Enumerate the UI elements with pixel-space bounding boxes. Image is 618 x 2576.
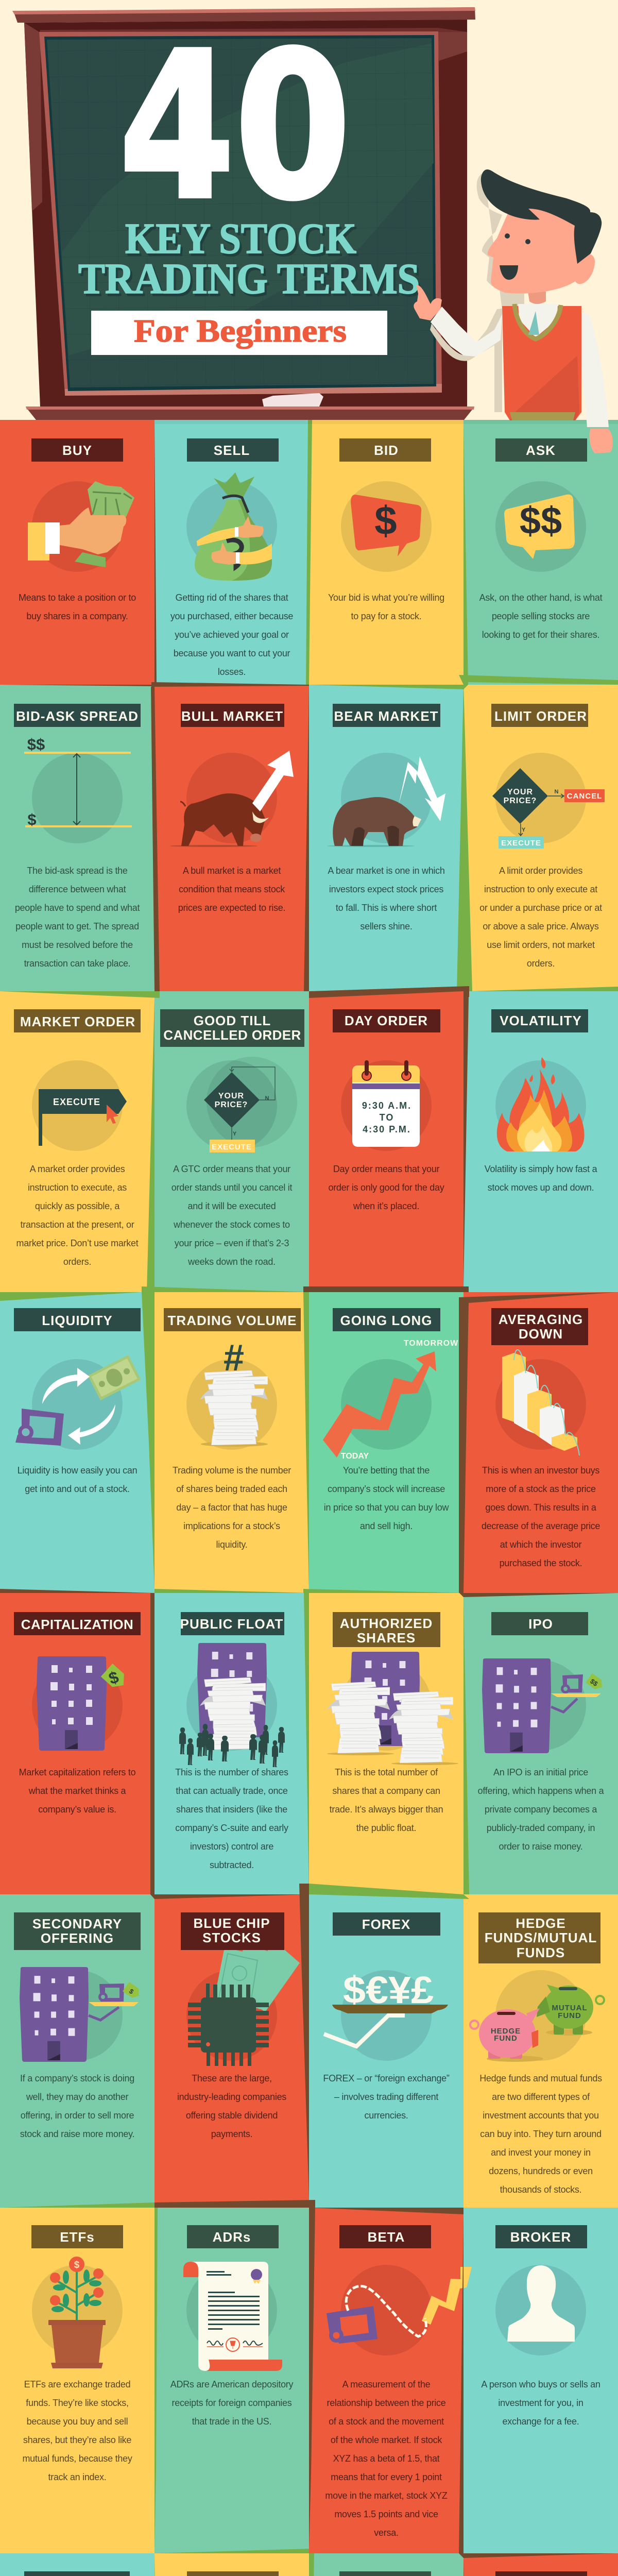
icon: rising zigzag arrow: TODAY [341,1452,369,1461]
heading: buy: BUY [62,443,92,458]
icon: limit order flowchart: N [555,789,559,795]
icon: spread diagram: $ [27,810,37,828]
description: authorized shares: trade. It’s always bigger than [330,1804,443,1815]
description: ipo: order to raise money. [499,1841,583,1852]
heading: limit order: LIMIT ORDER [494,708,587,724]
panel: liquidity [0,1292,154,1593]
heading: bull market: BULL MARKET [181,708,283,724]
description: ipo: offering, which happens when a [478,1786,605,1796]
description: hedge funds and mutual funds: dozens, hundreds or even [489,2166,593,2176]
description: broker: exchange for a fee. [503,2416,579,2427]
description: ipo: An IPO is an initial price [493,1767,588,1777]
icon: piggy banks: FUND [558,2011,581,2020]
teacher: outline [430,173,524,412]
description: bear market: sellers shine. [360,921,413,931]
heading: adrs [187,2225,279,2248]
description: going long: in price so that you can buy low [324,1502,450,1513]
heading: secondary offering: SECONDARY [32,1916,122,1931]
description: bid: to pay for a stock. [351,611,421,621]
icon: spread diagram [24,735,132,843]
description: blue chip stocks: These are the large, [192,2073,272,2083]
description: sell: you purchased, either because [170,611,293,621]
icon: bull with rising arrow [170,751,294,847]
panel: trading volume [154,1292,309,1593]
description: beta: of a stock and the movement [329,2416,444,2427]
description: limit order: A limit order provides [499,866,582,876]
description: bid-ask spread: The bid-ask spread is the [27,866,128,876]
heading: forex [333,1912,440,1936]
icon: microchip with cash [186,1940,300,2066]
description: broker: investment for you, in [498,2398,583,2408]
heading: dividend [187,2571,279,2576]
description: capitalization: what the market thinks a [28,1786,127,1796]
description: hedge funds and mutual funds: thousands of stocks. [500,2184,581,2195]
description: averaging down: This is when an investor buys [482,1465,599,1476]
ledge: top [12,7,475,23]
heading: good till cancelled order: GOOD TILL [194,1013,271,1028]
icon: money plant [32,2257,123,2368]
description: market order: A market order provides [30,1164,125,1174]
description: bid-ask spread: must be resolved before the [22,940,133,950]
heading: good till cancelled order [160,1009,304,1047]
description: ask: Ask, on the other hand, is what [479,592,603,603]
heading: market order [14,1009,141,1032]
description: buy: buy shares in a company. [26,611,128,621]
description: authorized shares: shares that a company can [332,1786,440,1796]
chalkboard [12,7,475,420]
panel: volatility [464,991,618,1292]
description: etfs: track an index. [48,2472,107,2482]
description: going long: You’re betting that the [343,1465,430,1476]
icon: flame [495,1057,586,1151]
heading: good till cancelled order: CANCELLED ORDER [163,1027,301,1043]
heading: trading volume [164,1308,301,1331]
description: good till cancelled order: whenever the stock comes to [173,1219,290,1230]
description: averaging down: purchased the stock. [500,1558,582,1568]
description: blue chip stocks: offering stable dividend [186,2110,278,2121]
icon: limit order flowchart: YOUR [507,788,533,796]
heading: capitalization: CAPITALIZATION [21,1617,133,1632]
description: bull market: condition that means stock [179,884,285,894]
description: adrs: ADRs are American depository [170,2379,294,2389]
icon: cash and certificate cycle [15,1355,141,1450]
description: bull market: prices are expected to rise. [178,903,285,913]
panel: ipo [464,1593,618,1894]
heading: day trading [24,2571,130,2576]
description: adrs: receipts for foreign companies [171,2398,292,2408]
description: bear market: to fall. This is where short [336,903,437,913]
heading: ask: ASK [526,443,556,458]
icon: limit order flowchart: PRICE? [504,796,537,805]
heading: volatility [491,1009,588,1032]
description: trading volume: liquidity. [216,1539,247,1550]
description: averaging down: more of a stock as the price [486,1484,596,1494]
panel: capitalization [0,1593,154,1894]
description: day order: order is only good for the day [328,1182,444,1193]
description: secondary offering: stock and raise more money. [20,2129,134,2139]
description: liquidity: get into and out of a stock. [25,1484,130,1494]
icon: calendar: 9:30 A.M. [362,1100,411,1111]
heading: ipo [491,1612,588,1635]
panel: limit order [464,685,618,991]
description: capitalization: company’s value is. [38,1804,116,1815]
description: limit order: orders. [527,958,555,969]
heading: bid-ask spread [14,704,141,727]
icon: falling bars [495,1350,586,1455]
icon: building with paper stacks [327,1652,458,1765]
icon: building with price tag [32,1656,129,1751]
description: good till cancelled order: your price – even if that’s 2-3 [175,1238,289,1248]
description: beta: means that for every 1 point [331,2472,442,2482]
description: bid: Your bid is what you’re willing [328,592,444,603]
description: limit order: use limit orders, not market [487,940,595,950]
description: averaging down: decrease of the average price [482,1521,600,1531]
description: etfs: shares, but they’re also like [23,2435,131,2445]
description: blue chip stocks: payments. [211,2129,252,2139]
heading: etfs: ETFs [60,2229,95,2245]
heading: going long: GOING LONG [340,1313,433,1328]
heading: averaging down: AVERAGING [499,1312,583,1327]
heading: ipo: IPO [528,1616,553,1632]
panel: beta [309,2208,472,2553]
icon: building serving certificate: $$ [589,1677,599,1688]
description: adrs: that trade in the US. [192,2416,271,2427]
panel: hedge funds and mutual funds [464,1894,618,2208]
panel: broker [464,2208,618,2553]
description: hedge funds and mutual funds: investment accounts that you [483,2110,599,2121]
heading: authorized shares [333,1612,440,1647]
icon: money plant: $ [74,2260,80,2270]
heading: bear market [333,704,440,727]
icon: piggy banks: MUTUAL [552,2004,588,2012]
icon: speech bubble dollar [341,481,432,572]
heading: authorized shares: SHARES [357,1630,416,1646]
description: going long: and sell high. [360,1521,413,1531]
icon: limit order flowchart [492,753,605,849]
description: hedge funds and mutual funds: are two different types of [492,2092,590,2102]
heading: bid-ask spread: BID-ASK SPREAD [16,708,139,724]
icon: gtc flowchart: EXECUTE [212,1143,252,1151]
heading: exchange [339,2571,431,2576]
description: broker: A person who buys or sells an [481,2379,600,2389]
icon: gtc flowchart: PRICE? [215,1100,248,1109]
description: beta: moves 1.5 points and vice [334,2509,438,2519]
icon: limit order flowchart: Y [522,827,526,833]
teacher character [414,170,613,453]
icon: gtc flowchart: YOUR [218,1092,244,1100]
description: capitalization: Market capitalization refers to [19,1767,136,1777]
subtitle banner [91,311,387,355]
description: sell: Getting rid of the shares that [175,592,288,603]
description: hedge funds and mutual funds: and invest your money in [491,2147,591,2158]
description: public float: subtracted. [210,1860,254,1870]
description: trading volume: Trading volume is the number [173,1465,291,1476]
heading: hedge funds/mutual funds: HEDGE [516,1916,566,1931]
teacher: hanging hand [589,429,613,453]
icon: piggy banks: FUND [494,2034,518,2043]
panel: good till cancelled order [154,991,309,1292]
description: forex: FOREX – or “foreign exchange” [323,2073,450,2083]
description: blue chip stocks: industry-leading companies [177,2092,286,2102]
icon: money bag hug [186,472,277,581]
heading: secondary offering: OFFERING [41,1930,114,1946]
panel: sell [154,420,309,685]
icon: speech bubble dollars [495,481,586,572]
description: authorized shares: This is the total number of [335,1767,438,1777]
panel: public float [154,1593,309,1894]
heading: execution [495,2571,587,2576]
heading: hedge funds/mutual funds: FUNDS/MUTUAL [485,1930,597,1945]
icon: calendar [341,1060,432,1151]
heading: averaging down: DOWN [519,1326,563,1342]
panel: execution [464,2553,618,2576]
heading: sell [187,438,279,462]
icon: currencies on tray [324,1969,448,2061]
description: market order: market price. Don’t use market [16,1238,139,1248]
heading: bid [339,438,431,462]
description: bear market: investors expect stock prices [329,884,443,894]
icon: gtc flowchart: Y [233,1131,237,1137]
icon: rising zigzag arrow: TOMORROW [404,1339,458,1348]
heading: bull market [181,704,284,727]
heading: bid: BID [374,443,399,458]
icon: calendar: 4:30 P.M. [363,1124,411,1134]
heading: hedge funds/mutual funds [478,1912,600,1963]
icon: bear with falling arrow [327,753,445,847]
description: public float: company’s C-suite and early [175,1823,288,1833]
description: authorized shares: the public float. [356,1823,416,1833]
icon: gtc flowchart: N [265,1095,269,1101]
panel: secondary offering [0,1894,154,2208]
description: trading volume: of shares being traded each [176,1484,287,1494]
panel: averaging down [464,1292,618,1593]
icon: execute flag [32,1060,127,1151]
panel: ask [464,420,618,685]
description: day order: when it’s placed. [353,1201,419,1211]
description: market order: quickly as possible, a [35,1201,120,1211]
description: going long: company’s stock will increase [328,1484,445,1494]
description: market order: transaction at the present, or [20,1219,134,1230]
description: buy: Means to take a position or to [19,592,136,603]
description: limit order: instruction to only execute at [484,884,597,894]
title: key stock trading terms [78,215,420,303]
title: key stock trading terms: TRADING TERMS [78,255,420,303]
panel: forex [309,1894,464,2208]
description: secondary offering: well, they may do another [26,2092,128,2102]
heading: public float: PUBLIC FLOAT [180,1616,283,1632]
teacher: right sleeve [577,311,609,427]
panel: buy [0,420,154,685]
icon: paper stack with hash [186,1337,277,1450]
panel: day trading [0,2553,154,2576]
description: good till cancelled order: A GTC order means that your [173,1164,290,1174]
description: volatility: Volatility is simply how fast a [485,1164,598,1174]
description: beta: XYZ has a beta of 1.5, that [333,2453,440,2464]
icon: building with price tag: $ [107,1668,121,1688]
title: 40: 40 [119,9,351,244]
heading: market order: MARKET ORDER [20,1014,135,1029]
description: beta: versa. [374,2528,399,2538]
panel: going long [309,1292,464,1593]
heading: broker [495,2225,587,2248]
panel: exchange [309,2553,464,2576]
description: market order: orders. [63,1257,91,1267]
icon: building serving certificate [482,1658,605,1753]
description: sell: because you want to cut your [174,648,290,658]
heading: beta [339,2225,431,2248]
panel: adrs [154,2208,309,2553]
description: beta: A measurement of the [342,2379,431,2389]
heading: liquidity: LIQUIDITY [42,1313,113,1328]
heading: blue chip stocks: STOCKS [202,1930,261,1945]
description: good till cancelled order: and it will be executed [188,1201,276,1211]
heading: forex: FOREX [362,1917,410,1932]
description: trading volume: implications for a stock’s [183,1521,280,1531]
description: averaging down: goes down. This results in a [485,1502,597,1513]
heading: beta: BETA [368,2229,405,2245]
icon: limit order flowchart: CANCEL [567,792,602,801]
icon: limit order flowchart: EXECUTE [501,839,541,848]
description: etfs: ETFs are exchange traded [24,2379,130,2389]
description: hedge funds and mutual funds: can buy into. They turn around [480,2129,602,2139]
icon: speech bubble dollars: $$ [520,499,562,542]
heading: bear market: BEAR MARKET [334,708,439,724]
icon: speech bubble dollar: $ [374,498,397,543]
heading: limit order [491,704,588,727]
heading: authorized shares: AUTHORIZED [340,1616,433,1631]
description: forex: currencies. [364,2110,408,2121]
panel: authorized shares [309,1593,464,1894]
description: bid-ask spread: transaction can take place. [24,958,130,969]
chalk [262,393,323,406]
heading: broker: BROKER [510,2229,571,2245]
description: averaging down: at which the investor [500,1539,581,1550]
description: etfs: funds. They’re like stocks, [26,2398,129,2408]
panel: bull market [154,685,309,991]
icon: certificate document [183,2262,282,2371]
description: limit order: or above a sale price. Always [483,921,599,931]
heading: ask [495,438,587,462]
teacher: arm pointing [414,285,502,357]
description: secondary offering: If a company’s stock is doing [20,2073,134,2083]
description: public float: investors) control are [190,1841,273,1852]
description: public float: that can actually trade, once [176,1786,288,1796]
ledge: bottom [26,406,474,420]
description: limit order: or under a purchase price or at [479,903,602,913]
heading: volatility: VOLATILITY [500,1013,582,1028]
panel: day order [309,991,464,1292]
description: ipo: private company becomes a [485,1804,597,1815]
heading: trading volume: TRADING VOLUME [168,1313,297,1328]
description: bid-ask spread: difference between what [29,884,126,894]
description: bid-ask spread: people want to get. The spread [15,921,139,931]
heading: public float [180,1612,284,1635]
description: etfs: mutual funds, because they [22,2453,132,2464]
icon: building serving certificate: $ [128,1987,135,1996]
heading: secondary offering [14,1912,141,1950]
icon: paper stack with hash: # [224,1337,244,1379]
description: sell: losses. [218,667,246,677]
icon: building, papers and people [179,1643,285,1767]
heading: sell: SELL [214,443,250,458]
icon: currencies on tray: $€¥£ [343,1969,434,2011]
icon: spread diagram: $$ [27,735,45,753]
icon: person silhouette [495,2265,586,2355]
icon: building serving certificate [20,1967,142,2062]
description: volatility: stock moves up and down. [488,1182,594,1193]
description: etfs: because you buy and sell [27,2416,128,2427]
description: beta: move in the market, stock XYZ [325,2490,448,2501]
description: forex: – involves trading different [334,2092,438,2102]
icon: chained certificate and arrow [327,2265,472,2355]
heading: blue chip stocks [181,1912,284,1950]
description: ask: looking to get for their shares. [482,630,599,640]
heading: blue chip stocks: BLUE CHIP [193,1916,270,1931]
heading: hedge funds/mutual funds: FUNDS [517,1945,565,1960]
description: hedge funds and mutual funds: Hedge funds and mutual funds [479,2073,602,2083]
description: ask: people selling stocks are [492,611,590,621]
title: key stock trading terms: KEY STOCK [125,215,356,263]
teacher: vest [502,304,581,420]
panel: bid-ask spread [0,685,154,991]
icon: execute flag: EXECUTE [53,1097,100,1107]
description: market order: instruction to execute, as [28,1182,127,1193]
description: trading volume: day – a factor that has huge [176,1502,287,1513]
heading: capitalization [14,1612,141,1635]
panel: etfs [0,2208,154,2553]
subtitle banner: For Beginners [134,314,347,349]
heading: averaging down [491,1308,588,1345]
heading: adrs: ADRs [213,2229,251,2245]
description: good till cancelled order: order stands until you cancel it [171,1182,293,1193]
panel: blue chip stocks [154,1894,309,2208]
description: bull market: A bull market is a market [183,866,281,876]
panel: dividend [154,2553,309,2576]
description: public float: shares that insiders (like the [176,1804,287,1815]
heading: day order: DAY ORDER [345,1013,428,1028]
heading: going long [333,1308,440,1331]
description: secondary offering: offering, in order to sell more [21,2110,134,2121]
description: liquidity: Liquidity is how easily you can [18,1465,137,1476]
description: good till cancelled order: weeks down the road. [187,1257,276,1267]
description: day order: Day order means that your [333,1164,439,1174]
icon: gtc flowchart [186,1057,297,1153]
heading: liquidity [14,1308,141,1331]
heading: buy [31,438,123,462]
icon: piggy banks [470,1970,604,2062]
heading: day order [333,1009,440,1032]
description: bid-ask spread: people have to spend and what [15,903,140,913]
heading: etfs [31,2225,123,2248]
description: ipo: publicly-traded company, in [487,1823,595,1833]
description: bear market: A bear market is one in which [328,866,445,876]
icon: rising zigzag arrow [323,1339,458,1461]
description: public float: This is the number of shares [175,1767,288,1777]
description: sell: you’ve achieved your goal or [175,630,289,640]
icon: hand holding cash [28,481,134,572]
icon: calendar: TO [380,1112,394,1123]
teacher: neck [528,292,546,304]
panel: market order [0,991,154,1292]
icon: piggy banks: HEDGE [491,2027,521,2036]
description: beta: of the whole market. If stock [331,2435,442,2445]
description: beta: relationship between the price [327,2398,446,2408]
teacher: head [481,170,602,294]
panel: bid [309,420,464,685]
panel: bear market [309,685,464,991]
